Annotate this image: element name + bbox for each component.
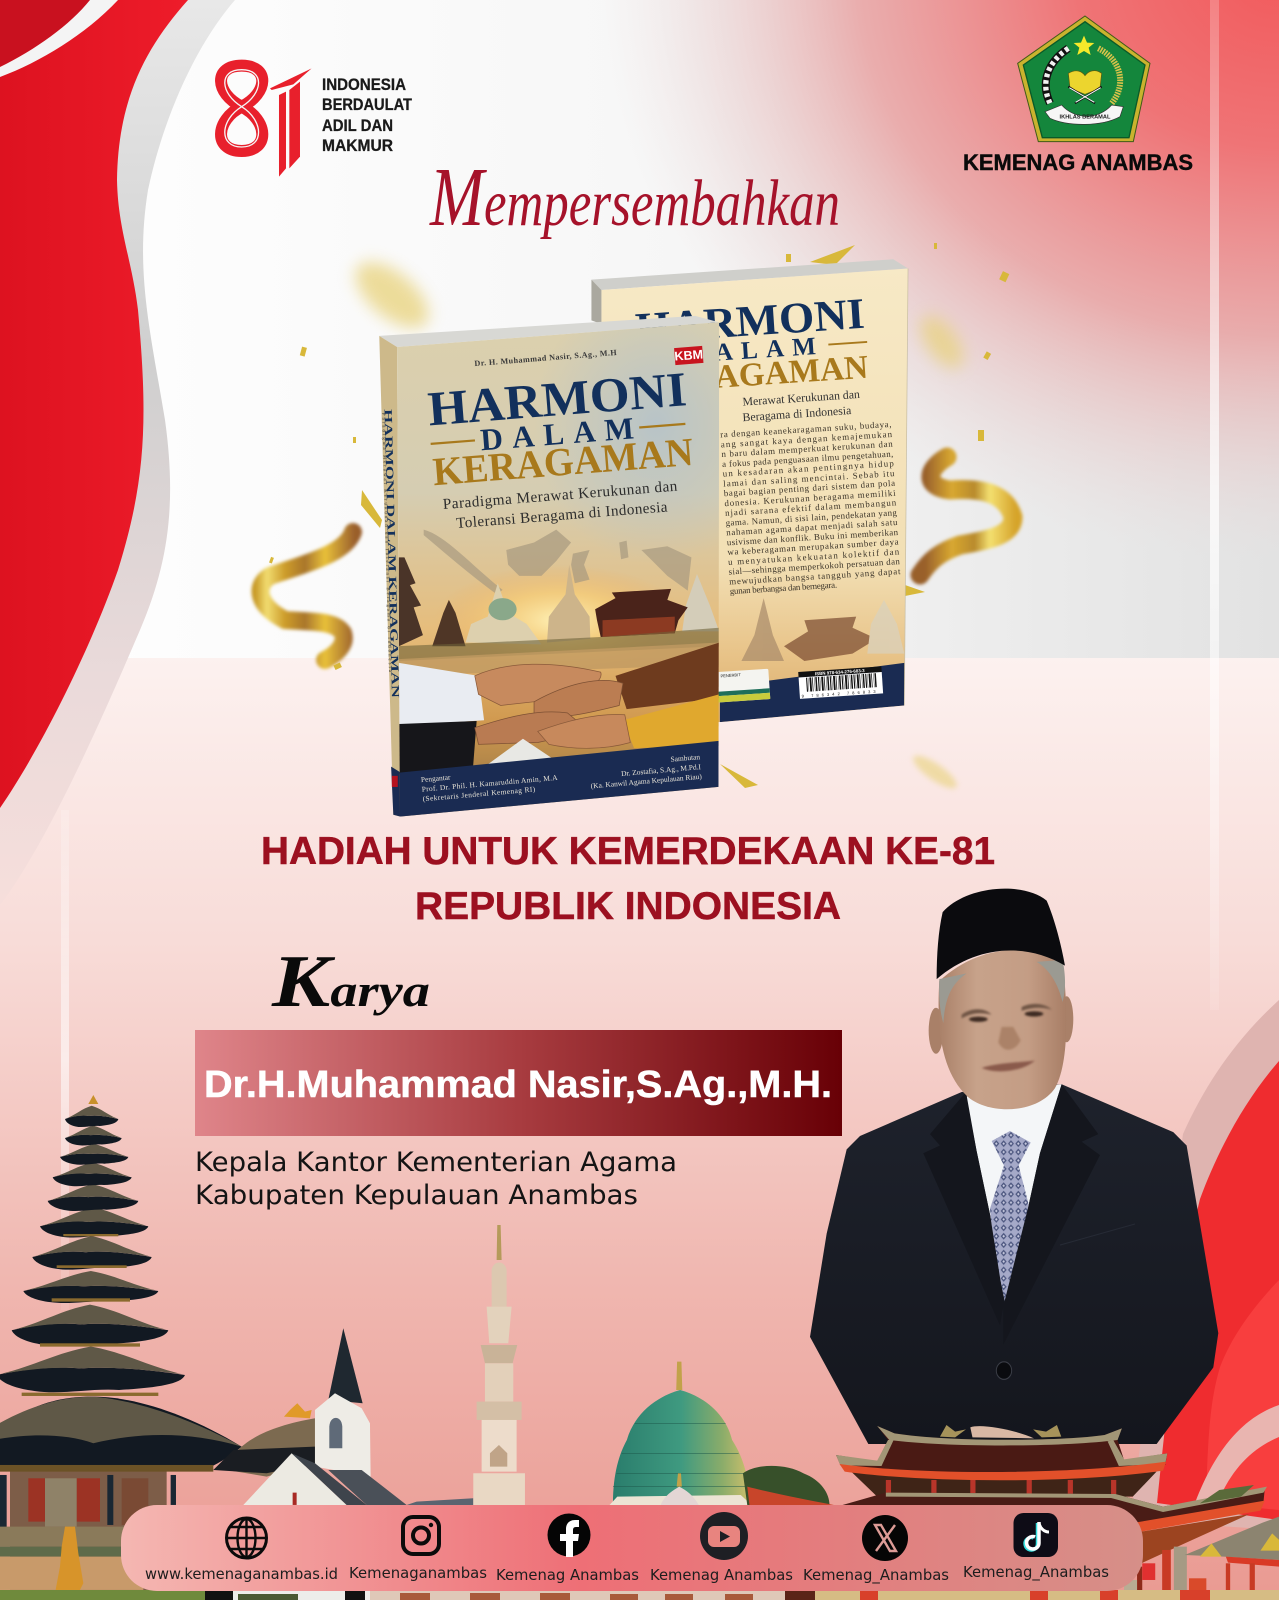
job title	[195, 1147, 677, 1211]
social labels: Kemenag Anambas	[650, 1566, 793, 1584]
scenery: church and thatch	[213, 1328, 473, 1505]
roof plants	[1200, 1485, 1254, 1503]
book top pages	[379, 316, 719, 347]
headline: REPUBLIK INDONESIA	[415, 885, 841, 928]
back cover blurb: un kesadaran akan pentingnya hidup	[722, 458, 895, 479]
tie	[990, 1131, 1031, 1307]
back cover title: AGAMAN	[714, 349, 869, 396]
side pavilion	[1142, 1517, 1279, 1593]
publisher logo: KBM	[674, 347, 704, 364]
back cover title: Beragama di Indonesia	[742, 403, 852, 424]
dancer statue	[55, 1527, 83, 1593]
temple lower roof	[843, 1488, 1265, 1523]
temple upper roof	[836, 1426, 1167, 1473]
back cover blurb: ang sangat kaya dengan kemajemukan	[721, 429, 893, 449]
front cover text: DALAM	[479, 410, 635, 457]
slogan text: INDONESIA	[322, 75, 406, 94]
icon: instagram	[403, 1517, 439, 1554]
social labels: Kemenag_Anambas	[963, 1563, 1109, 1582]
tree	[743, 1466, 830, 1505]
social media bar	[121, 1505, 1143, 1591]
tiers of thatch	[0, 1095, 242, 1472]
back cover blurb: lamai dan saling mencintai. Sebab itu	[723, 468, 895, 489]
barcode: ISBN 978-634-276-683-3	[815, 668, 865, 676]
front cover text: Toleransi Beragama di Indonesia	[456, 498, 668, 532]
name banner: Dr.H.Muhammad Nasir,S.Ag.,M.H.	[204, 1064, 832, 1106]
headline	[261, 830, 995, 928]
back cover blurb: n baru dalam memperkuat kerukunan dan	[721, 439, 893, 459]
book spine: HARMONI DALAM KERAGAMAN	[381, 409, 401, 698]
brand name: KEMENAG ANAMBAS	[963, 150, 1193, 175]
slogan text: ADIL DAN	[322, 116, 393, 135]
ears	[929, 1008, 943, 1054]
social labels: Kemenag Anambas	[496, 1566, 639, 1584]
back cover blurb: gunan berbangsa dan bernegara.	[730, 580, 837, 596]
hair	[939, 973, 967, 1023]
emblem motto: IKHLAS BERAMAL	[1060, 114, 1111, 120]
back cover title: ALAM	[714, 333, 825, 367]
gold ribbon right	[920, 457, 1013, 575]
emblem: Kementerian Agama	[1018, 16, 1150, 142]
barcode: 9 786342 786833	[802, 689, 876, 699]
social labels	[145, 1563, 1109, 1585]
blurred gold confetti	[344, 250, 971, 793]
icon: X	[862, 1515, 908, 1561]
scenery: green dome, tree and Chinese temple	[610, 1362, 1279, 1593]
foreword credits: Pengantar	[421, 773, 451, 784]
back cover blurb: donesia. Kerukunan beragama memiliki	[724, 488, 896, 508]
81 mark	[221, 66, 312, 177]
shirt	[966, 1084, 1062, 1306]
foreword credits: Dr. Zostafia, S.Ag., M.Pd.I	[621, 762, 702, 778]
job title: Kabupaten Kepulauan Anambas	[195, 1180, 638, 1211]
nose and mouth	[998, 1027, 1021, 1050]
bottom strip of scenery	[0, 1590, 1279, 1600]
foreword credits	[421, 752, 703, 803]
social labels: Kemenag_Anambas	[803, 1566, 949, 1585]
eyes and brows	[962, 1004, 1052, 1071]
back cover blurb: usivisme dan konflik. Buku ini memberikan	[727, 527, 899, 547]
social labels: www.kemenaganambas.id	[145, 1565, 338, 1583]
left red wave	[0, 0, 235, 905]
script heading: Mempersembahkan	[429, 151, 840, 244]
slogan text: BERDAULAT	[322, 95, 413, 114]
publisher label: PENERBIT	[720, 672, 741, 678]
gold ribbon left	[260, 532, 353, 660]
book spine	[379, 336, 401, 817]
right red waves	[1130, 1000, 1279, 1530]
cover bottom band	[397, 741, 721, 820]
foreword credits: (Sekretaris Jenderal Kemenag RI)	[422, 784, 536, 803]
front cover text: Paradigma Merawat Kerukunan dan	[442, 478, 678, 513]
scenery: minaret	[473, 1225, 525, 1505]
back cover blurb	[720, 419, 902, 596]
name banner	[195, 1030, 842, 1136]
headline: HADIAH UNTUK KEMERDEKAAN KE-81	[261, 830, 995, 873]
social labels: Kemenaganambas	[349, 1564, 487, 1582]
portrait	[810, 889, 1218, 1444]
slogan text	[322, 75, 413, 155]
back cover title: Merawat Kerukunan dan	[742, 387, 860, 409]
icon: globe	[226, 1518, 266, 1558]
dragons	[940, 1425, 1061, 1437]
front cover text: KERAGAMAN	[431, 429, 695, 494]
publisher label	[717, 669, 770, 702]
back cover blurb: nahaman agama dapat menjadi salah satu	[726, 517, 898, 537]
back cover blurb: bagai bagian penting dari sistem dan pola	[724, 478, 895, 498]
back cover temples	[741, 598, 904, 661]
foreword credits: (Ka. Kanwil Agama Kepulauan Riau)	[590, 772, 703, 790]
pavilion base	[0, 1470, 176, 1593]
back cover title: HARMONI	[634, 290, 866, 353]
icon: tiktok	[1014, 1513, 1058, 1557]
back cover blurb: ra dengan keanekaragaman suku, budaya,	[720, 419, 892, 439]
back cover title	[635, 299, 868, 422]
temple upper level shadow	[851, 1472, 1157, 1497]
lapels	[923, 1084, 1100, 1345]
front cover text: Dr. H. Muhammad Nasir, S.Ag., M.H	[474, 348, 618, 368]
script label: Karya: Karya	[271, 941, 430, 1023]
foreword credits: Sambutan	[670, 752, 701, 764]
dome finial	[676, 1362, 682, 1390]
temple hands	[970, 1426, 1034, 1438]
front cover text: HARMONI	[426, 361, 688, 436]
back cover blurb: wa keberagaman merupakan sumber daya	[727, 537, 899, 557]
icon: youtube	[700, 1512, 748, 1560]
back cover blurb: u menyatukan kekuatan kolektif dan	[728, 546, 900, 567]
logo: HUT 81	[221, 66, 413, 177]
temple pillars	[1124, 1547, 1187, 1593]
book: front cover	[379, 316, 720, 816]
barcode	[798, 666, 883, 699]
cover hands	[399, 643, 719, 774]
small confetti	[269, 243, 1009, 788]
front cover text	[424, 343, 698, 534]
map of Indonesia	[424, 530, 691, 594]
book: back cover	[591, 259, 912, 724]
back cover blurb: njadi sarana efektif dalam membangun	[725, 497, 897, 518]
job title: Kepala Kantor Kementerian Agama	[195, 1147, 677, 1178]
peci cap	[937, 889, 1065, 979]
icon: facebook	[548, 1514, 590, 1557]
back cover blurb: a fokus pada penguasaan ilmu pengetahuan,	[722, 449, 893, 469]
dome	[613, 1390, 749, 1503]
back cover blurb: sial—sehingga memperkokoh persatuan dan	[728, 556, 901, 577]
back cover blurb: gama. Namun, di sisi lain, pendekatan yang	[725, 507, 898, 528]
back cover blurb: mewujudkan bangsa tangguh yang dapat	[729, 566, 901, 587]
cover temples	[397, 557, 719, 661]
slogan text: MAKMUR	[322, 136, 393, 155]
scenery: Balinese pagoda	[0, 1095, 242, 1593]
foreword credits: Prof. Dr. Phil. H. Kamaruddin Amin, M.A	[421, 773, 559, 794]
jacket	[810, 1084, 1218, 1444]
book spine: Paradigma Merawat Kerukunan dan Toleransi Beragama di Indonesia	[380, 413, 392, 673]
face	[939, 950, 1066, 1109]
